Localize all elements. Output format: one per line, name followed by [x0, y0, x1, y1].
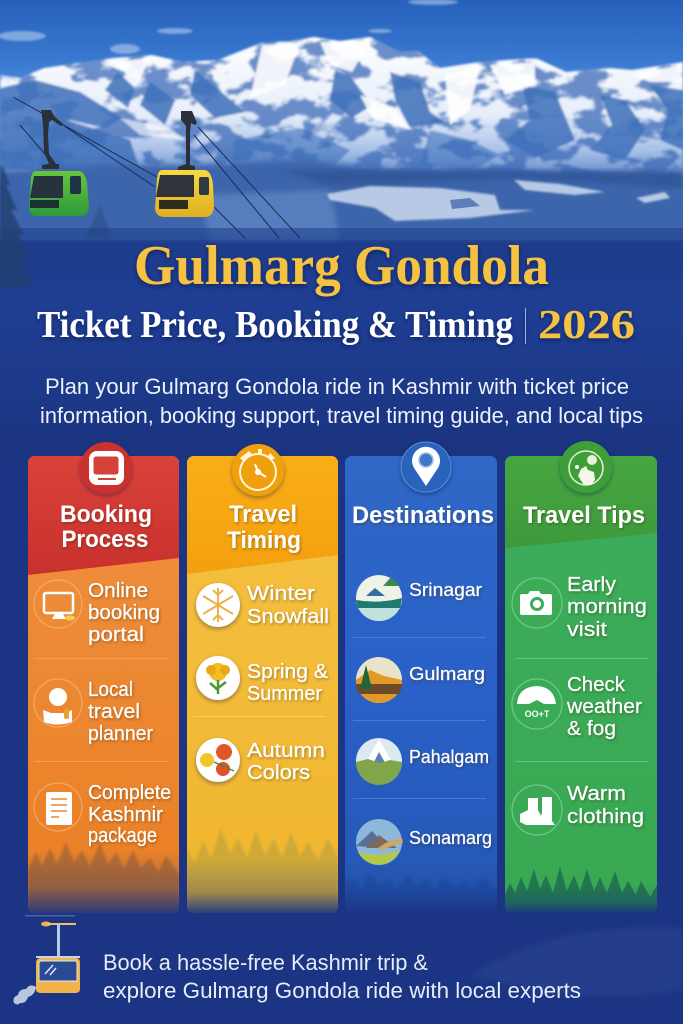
item: spring and summer: Spring &	[247, 661, 329, 683]
item: complete kashmir package: package	[88, 825, 157, 847]
item: winter snowfall	[196, 583, 329, 628]
icon: stopwatch badge	[232, 444, 284, 496]
item: early morning visit	[512, 574, 647, 641]
dark blue overlay over lower photo	[0, 228, 683, 458]
item: local travel planner	[34, 679, 153, 745]
yellow gondola	[155, 111, 214, 217]
left conifer tree	[0, 165, 112, 288]
footer call to action: Book a hassle-free Kashmir trip &	[103, 950, 428, 975]
heading: Timing	[227, 527, 301, 554]
heading	[227, 501, 301, 554]
item: complete kashmir package: Kashmir	[88, 804, 163, 826]
item: srinagar: Srinagar	[409, 579, 482, 600]
item: warm clothing: clothing	[567, 806, 644, 828]
item: online booking portal: Online	[88, 580, 148, 602]
item: autumn colors: Colors	[247, 762, 310, 784]
item: warm clothing: Warm	[567, 783, 626, 805]
intro paragraph: information, booking support, travel timing guide, and local tips	[40, 403, 643, 428]
intro paragraph	[40, 374, 643, 428]
item: sonamarg: Sonamarg	[409, 827, 492, 848]
item: autumn colors	[196, 738, 325, 784]
title: Gulmarg Gondola	[134, 235, 549, 297]
item: gulmarg: Gulmarg	[409, 663, 485, 684]
item: autumn colors: Autumn	[247, 740, 325, 762]
panel: travel timing	[187, 444, 338, 913]
footer call to action: explore Gulmarg Gondola ride with local experts	[103, 978, 581, 1003]
item: pahalgam	[356, 738, 489, 785]
panel: booking process	[28, 442, 179, 913]
heading: Travel	[229, 501, 297, 528]
footer band background with snow hills	[0, 913, 683, 1024]
icon: map pin badge	[401, 442, 451, 492]
snow fields	[327, 180, 670, 221]
item: complete kashmir package: Complete	[88, 782, 171, 804]
panel: travel tips	[505, 441, 657, 913]
item: winter snowfall: Snowfall	[247, 606, 329, 628]
item: online booking portal: booking	[88, 602, 160, 624]
snow mountain range	[0, 37, 683, 178]
icon: tips badge	[560, 441, 612, 493]
hero photo: sky and snow mountains	[0, 0, 683, 240]
heading: Destinations	[352, 502, 494, 529]
subtitle: 2026	[538, 301, 635, 347]
heading: Travel Tips	[523, 502, 645, 529]
item: warm clothing	[512, 783, 644, 835]
panel: destinations	[345, 442, 497, 913]
item: complete kashmir package	[34, 782, 171, 847]
intro paragraph: Plan your Gulmarg Gondola ride in Kashmir with ticket price	[45, 374, 629, 399]
cables	[13, 97, 300, 238]
item: check weather and fog: weather	[566, 696, 642, 718]
subtitle: Ticket Price, Booking & Timing	[37, 304, 513, 346]
forest band	[0, 160, 683, 240]
item: early morning visit: Early	[567, 574, 616, 596]
item: pahalgam: Pahalgam	[409, 746, 489, 767]
footer call to action	[103, 950, 581, 1003]
icon: footer gondola	[14, 915, 80, 1004]
green gondola	[29, 110, 89, 216]
heading: Booking	[60, 501, 152, 528]
item: early morning visit: morning	[567, 596, 647, 618]
item: sonamarg	[356, 819, 492, 865]
item: early morning visit: visit	[567, 619, 608, 641]
item: online booking portal: portal	[88, 624, 144, 646]
item: check weather and fog	[512, 674, 642, 740]
item: local travel planner: Local	[88, 679, 133, 701]
heading: Process	[62, 526, 148, 553]
item: winter snowfall: Winter	[247, 583, 315, 605]
item: local travel planner: planner	[88, 723, 153, 745]
item: check weather and fog: & fog	[567, 718, 616, 740]
item: check weather and fog: Check	[567, 674, 626, 696]
item: online booking portal	[34, 580, 160, 646]
item: local travel planner: travel	[88, 701, 140, 723]
item: spring and summer: Summer	[247, 683, 322, 705]
heading	[60, 501, 152, 553]
icon: booking badge	[80, 442, 132, 494]
item: srinagar	[356, 575, 482, 621]
item: check weather and fog: OO+T	[525, 709, 550, 719]
item: spring and summer	[196, 656, 329, 705]
item: gulmarg	[356, 657, 485, 703]
